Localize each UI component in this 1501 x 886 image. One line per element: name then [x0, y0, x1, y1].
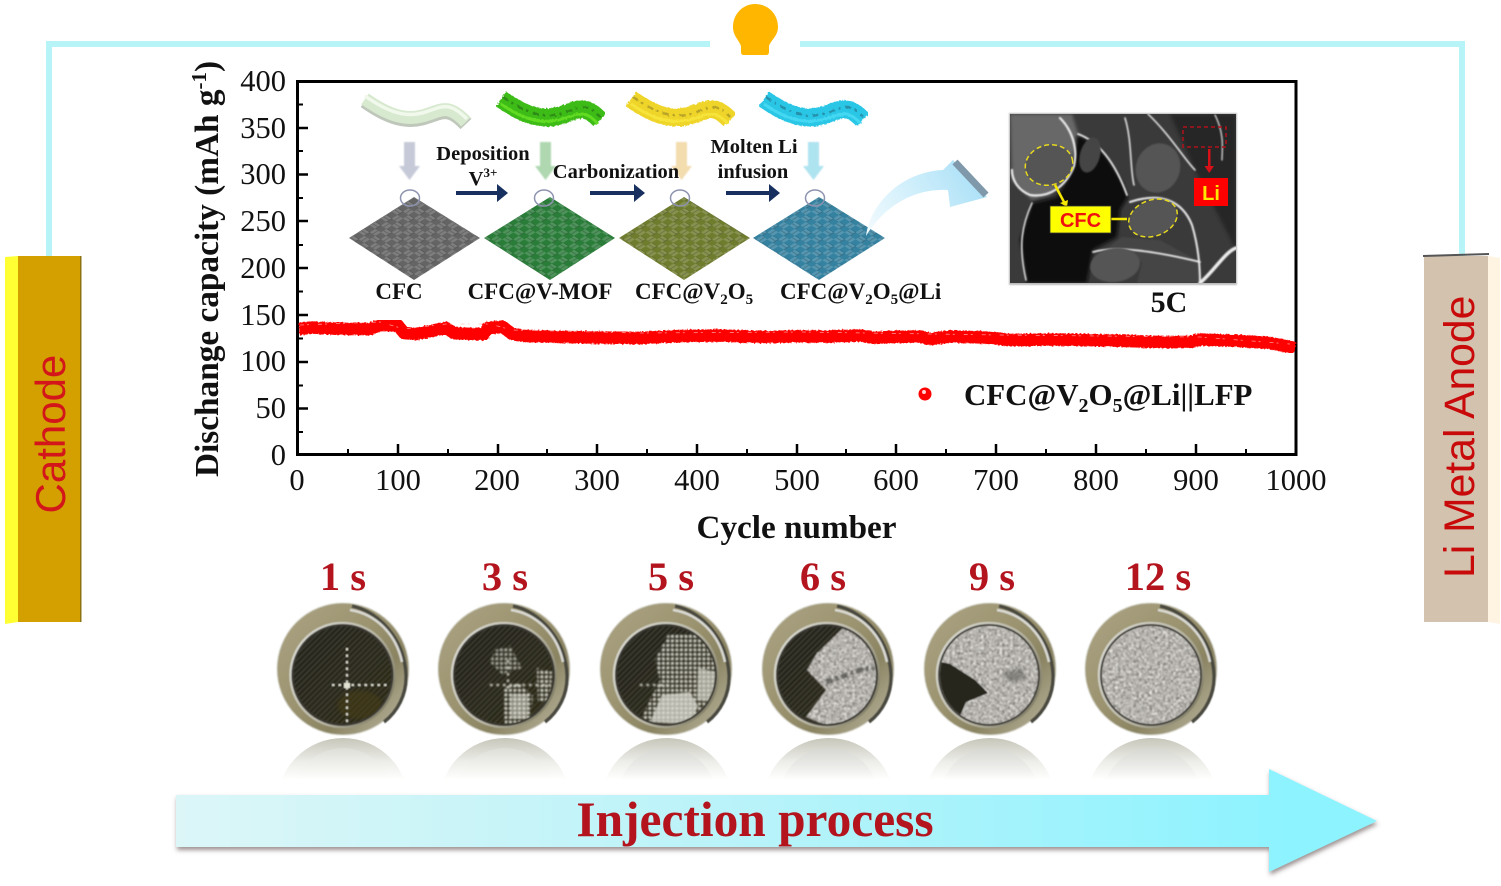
data series: discharge capacity [299, 322, 1295, 348]
material labels: 5 [746, 292, 753, 308]
Li arrow [1204, 149, 1214, 173]
material labels: O [873, 279, 891, 304]
y axis tick labels: 250 [240, 204, 286, 238]
x axis title: Cycle number [696, 509, 897, 546]
icon: light bulb [733, 4, 778, 55]
y axis tick labels [240, 64, 286, 472]
y axis tick labels: 0 [271, 438, 286, 472]
x axis tick labels [289, 463, 1326, 497]
y axis tick labels: 150 [240, 298, 286, 332]
CFC pointer lines [1055, 185, 1127, 219]
Li callout [1194, 178, 1228, 206]
time labels: 6 s [800, 554, 846, 599]
Li callout: Li [1202, 183, 1220, 205]
arrow: injection process [176, 769, 1377, 872]
x axis tick labels: 0 [289, 463, 305, 497]
x axis tick labels: 200 [474, 463, 520, 497]
fiber: bare carbon fiber [365, 96, 467, 124]
material labels: @Li [898, 279, 942, 305]
chart: discharge capacity vs cycle number [187, 61, 1326, 546]
y axis tick labels: 350 [240, 111, 286, 145]
dark void [1020, 135, 1128, 283]
coin: 3 s [438, 603, 570, 735]
rate label: 5C [1151, 286, 1187, 319]
material labels: 5 [891, 292, 898, 308]
material labels: O [728, 279, 746, 304]
y axis title: Dischange capacity (mAh g [189, 89, 226, 477]
carbon fiber cloth tiles [349, 197, 885, 280]
process step labels: V [469, 168, 483, 190]
CFC callout [1050, 206, 1111, 233]
grey fracture surface [1105, 237, 1200, 283]
process step labels: infusion [718, 161, 789, 183]
material labels: CFC@V [635, 279, 720, 304]
y axis tick labels: 400 [240, 64, 286, 98]
chart frame and ticks [298, 82, 1296, 454]
panel: Li metal anode block [1423, 254, 1500, 624]
coin: 5 s [600, 603, 732, 735]
Li region dashed box [1183, 127, 1226, 147]
x axis tick labels: 700 [973, 463, 1019, 497]
legend: 2 [1079, 395, 1089, 417]
curved arrow to micrograph [866, 160, 987, 236]
micrograph: SEM cross section [1009, 113, 1237, 319]
time labels: 12 s [1125, 554, 1191, 599]
fiber sheath [1010, 114, 1080, 200]
coin: 9 s [924, 603, 1056, 735]
coin: 6 s [762, 603, 894, 735]
x axis tick labels: 300 [574, 463, 620, 497]
process step labels: Deposition [436, 143, 530, 165]
CFC callout: CFC [1060, 210, 1101, 232]
time labels: 3 s [482, 554, 528, 599]
fiber outlines dashed [1024, 144, 1178, 238]
inset: fabrication schematic [349, 96, 987, 308]
legend [918, 377, 1252, 417]
material labels: CFC [375, 279, 423, 304]
coin reflections [285, 738, 1210, 776]
x axis tick labels: 900 [1173, 463, 1219, 497]
x axis tick labels: 800 [1073, 463, 1119, 497]
y axis tick labels: 50 [256, 391, 286, 425]
fiber: Li infused [764, 97, 863, 124]
anode label: Li Metal Anode [1436, 296, 1484, 578]
magnifier circles [400, 190, 824, 206]
legend: CFC@V [964, 377, 1079, 412]
y axis title: ) [189, 61, 226, 72]
x axis tick labels: 100 [375, 463, 421, 497]
process step labels: Carbonization [553, 161, 680, 183]
time labels: 5 s [648, 554, 694, 599]
time labels: 9 s [969, 554, 1015, 599]
x axis tick labels: 1000 [1266, 463, 1326, 497]
legend: 5 [1113, 395, 1123, 417]
fiber cross sections [1025, 138, 1180, 282]
coin: 1 s [277, 603, 409, 735]
fiber: V2O5 coated [631, 97, 730, 124]
panel: cathode block [5, 256, 82, 624]
legend: O [1089, 377, 1113, 412]
x axis tick labels: 600 [873, 463, 919, 497]
fiber: V-MOF coated [501, 97, 600, 124]
x axis tick labels: 500 [774, 463, 820, 497]
process step labels [436, 136, 798, 190]
coin: 12 s [1085, 603, 1217, 735]
time labels: 1 s [320, 554, 366, 599]
y axis tick labels: 100 [240, 344, 286, 378]
bright ridges [1012, 114, 1236, 283]
material labels: 2 [865, 292, 873, 308]
time labels [320, 554, 1191, 599]
cathode label: Cathode [27, 355, 74, 514]
upper right dark area [1170, 114, 1236, 250]
process arrows [456, 184, 780, 202]
process step labels: 3+ [483, 165, 497, 180]
material labels: CFC@V [780, 279, 865, 304]
material labels: CFC@V-MOF [468, 279, 612, 305]
y axis tick labels: 200 [240, 251, 286, 285]
process step labels: Molten Li [710, 136, 798, 158]
x axis tick labels: 400 [674, 463, 720, 497]
arrow label: Injection process [576, 792, 934, 847]
legend: @Li||LFP [1123, 377, 1252, 412]
y axis tick labels: 300 [240, 157, 286, 191]
down arrows [399, 142, 824, 180]
y axis title: -1 [187, 72, 211, 89]
material labels [375, 279, 942, 308]
material labels: 2 [720, 292, 728, 308]
circuit wire [49, 44, 1462, 256]
